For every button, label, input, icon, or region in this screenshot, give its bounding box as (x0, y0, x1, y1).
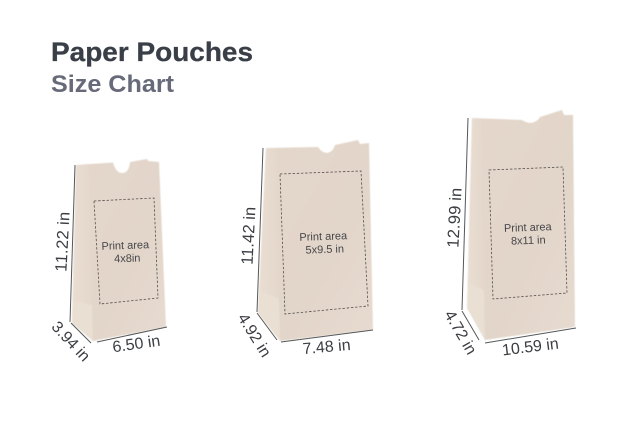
print area label (101, 239, 151, 266)
depth label: 4.92 in (234, 311, 274, 360)
bag body (258, 140, 373, 341)
depth label: 3.94 in (48, 319, 93, 365)
print area label: 5x9.5 in (305, 243, 344, 257)
height label: 12.99 in (444, 187, 466, 248)
small bag (48, 159, 167, 365)
dimension lines (462, 118, 576, 343)
print area label: Print area (504, 221, 553, 235)
height label: 11.22 in (52, 211, 74, 272)
print area (489, 167, 567, 299)
depth label: 4.72 in (441, 308, 479, 358)
width label: 7.48 in (302, 337, 351, 358)
print area (280, 171, 368, 314)
title: Paper Pouches (51, 37, 253, 67)
height label: 11.42 in (239, 206, 260, 265)
width label: 10.59 in (501, 336, 560, 359)
dimension lines (257, 148, 373, 342)
large bag (441, 110, 576, 359)
width label: 6.50 in (111, 333, 161, 356)
print area label (299, 230, 349, 257)
print area label: 4x8in (114, 252, 141, 265)
subtitle: Size Chart (51, 71, 174, 98)
print area (94, 198, 158, 304)
bag body (467, 110, 575, 340)
print area label: Print area (299, 230, 348, 244)
print area label: 8x11 in (511, 234, 546, 248)
print area label (504, 221, 553, 248)
dimension lines (70, 165, 167, 343)
print area label: Print area (101, 239, 150, 253)
medium bag (234, 140, 373, 360)
bag body (72, 159, 166, 341)
